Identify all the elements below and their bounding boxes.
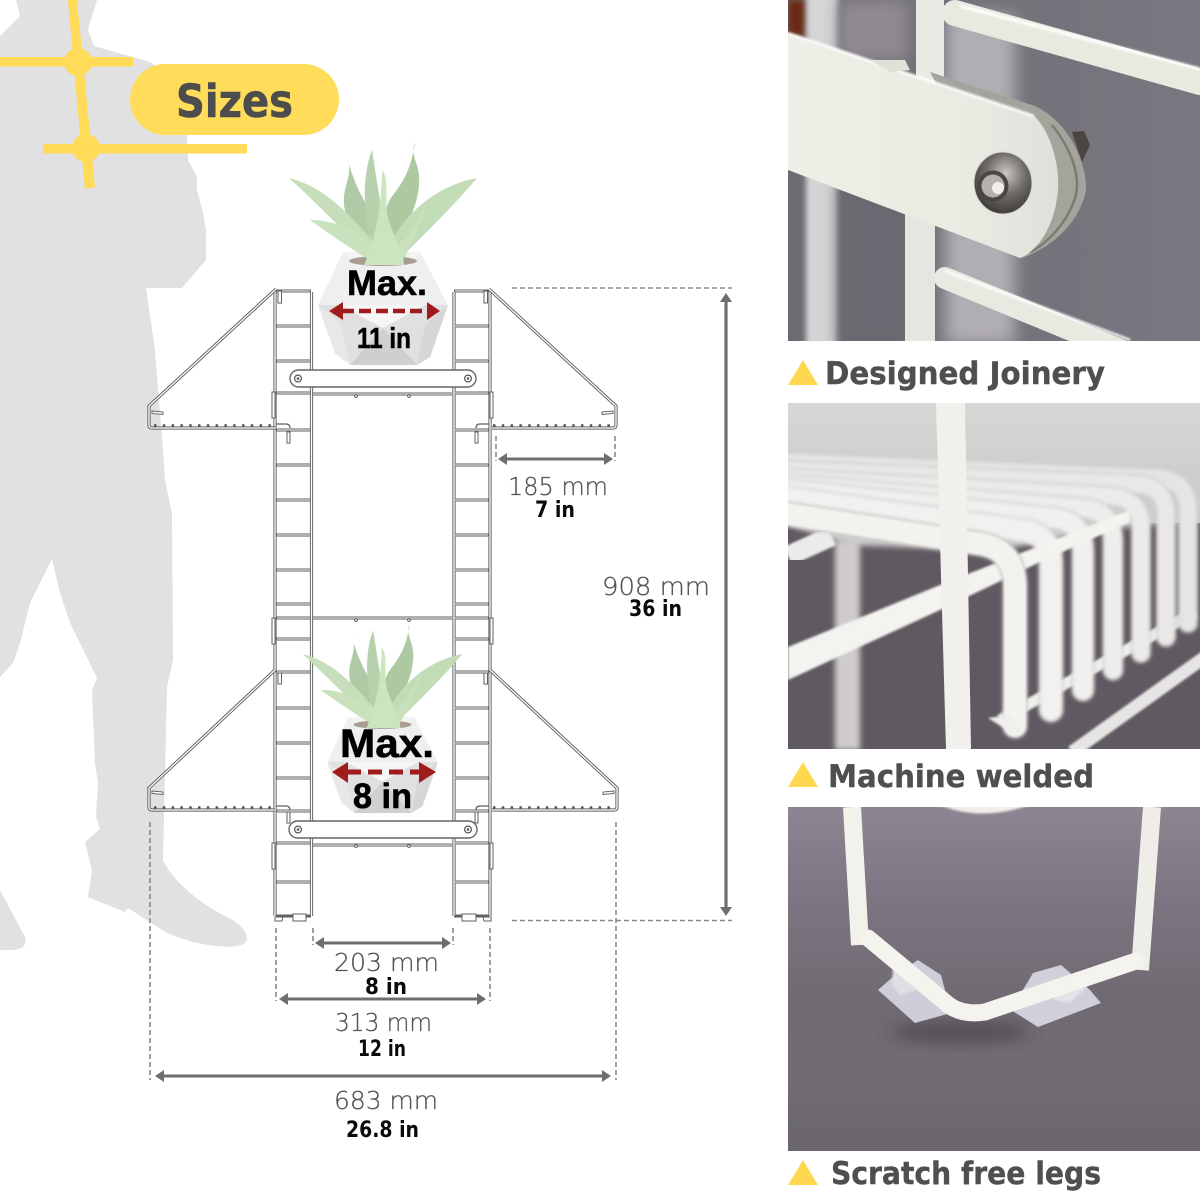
dimension: 185 mm / 7 in: 185 mm bbox=[508, 472, 608, 501]
top left shelf bracket bbox=[149, 289, 290, 428]
photo: designed joinery bolt close-up bbox=[788, 0, 1200, 360]
lower left shelf bracket bbox=[149, 670, 290, 810]
top plant pot: Max. 11 in: 11 in bbox=[357, 323, 411, 355]
dimension: 908 mm / 36 in bbox=[602, 293, 732, 916]
dimension: 203 mm / 8 in bbox=[315, 937, 451, 1000]
top joining plate with bolts bbox=[290, 370, 476, 387]
title pill: Sizes: Sizes bbox=[176, 75, 293, 128]
dimension: 683 mm / 26.8 in bbox=[155, 1070, 611, 1143]
dimension: 185 mm / 7 in: 7 in bbox=[535, 498, 575, 523]
caption: Designed Joinery: Designed Joinery bbox=[825, 356, 1105, 392]
photo: scratch free legs bbox=[788, 805, 1200, 1151]
caption: Machine welded: Machine welded bbox=[828, 759, 1094, 795]
top right shelf bracket bbox=[476, 289, 616, 428]
dimension guides bbox=[150, 288, 732, 1080]
dimension: 313 mm / 12 in bbox=[279, 993, 486, 1062]
photo: machine welded wire hooks bbox=[788, 403, 1200, 752]
dimension: 185 mm / 7 in bbox=[498, 453, 613, 523]
title pill: Sizes bbox=[130, 64, 339, 135]
top plant pot: Max. 11 in: Max. bbox=[347, 264, 427, 303]
dimension: 313 mm / 12 in: 313 mm bbox=[335, 1008, 432, 1037]
yellow height marker crosshair bbox=[0, 0, 247, 189]
lower plant pot: Max. 8 in: Max. bbox=[340, 722, 434, 766]
silhouette: standing person for scale bbox=[0, 0, 247, 950]
lower plant pot: Max. 8 in bbox=[303, 624, 462, 816]
dimension: 203 mm / 8 in: 203 mm bbox=[334, 948, 439, 977]
lower right shelf bracket bbox=[476, 670, 617, 810]
dimension: 908 mm / 36 in: 36 in bbox=[629, 597, 682, 622]
wire shelf frame bbox=[272, 291, 493, 921]
dimension: 683 mm / 26.8 in: 26.8 in bbox=[346, 1118, 419, 1143]
dimension: 683 mm / 26.8 in: 683 mm bbox=[334, 1086, 438, 1115]
dimension: 203 mm / 8 in: 8 in bbox=[365, 975, 407, 1000]
lower plant pot: Max. 8 in: 8 in bbox=[353, 777, 412, 816]
dimension: 313 mm / 12 in: 12 in bbox=[358, 1037, 406, 1062]
small side clips and hooks bbox=[272, 291, 493, 921]
caption: Scratch free legs: Scratch free legs bbox=[831, 1156, 1101, 1192]
top plant pot: Max. 11 in bbox=[289, 142, 477, 365]
dimension: 908 mm / 36 in: 908 mm bbox=[602, 572, 710, 601]
lower joining plate with bolts bbox=[289, 821, 477, 838]
